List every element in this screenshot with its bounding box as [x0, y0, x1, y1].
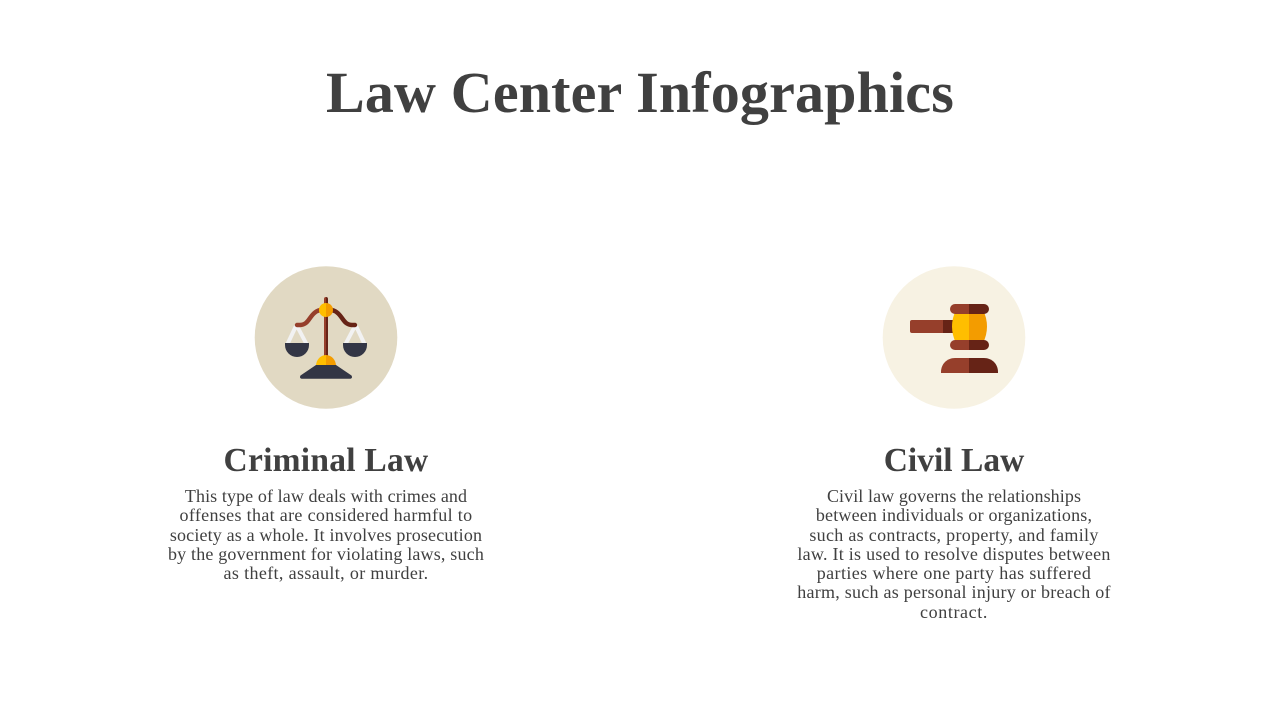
text: civil law description: harm, such as personal injury or breach of [797, 582, 1111, 602]
text: civil law description [797, 486, 1111, 622]
scales pans [285, 343, 367, 357]
heading: civil law: Civil Law [884, 442, 1024, 479]
text: criminal law description: as theft, assault, or murder. [224, 563, 428, 583]
gavel top cap [950, 304, 989, 314]
gavel background circle [883, 266, 1025, 409]
scales post [324, 297, 328, 356]
heading: criminal law: Criminal Law [224, 442, 428, 479]
text: civil law description: between individuals or organizations, [816, 505, 1092, 525]
title: Law Center Infographics [326, 60, 954, 125]
text: criminal law description: offenses that are considered harmful to [180, 505, 472, 525]
text: civil law description: contract. [920, 602, 988, 622]
scales beam [297, 310, 355, 325]
text: criminal law description [168, 486, 484, 583]
text: civil law description: parties where one party has suffered [817, 563, 1091, 583]
gavel block [941, 358, 998, 373]
scales strings [287, 326, 365, 345]
icon: gavel [882, 266, 1026, 409]
icon: scales of justice [254, 266, 398, 409]
text: criminal law description: by the government for violating laws, such [168, 544, 484, 564]
gavel bottom cap [950, 340, 989, 350]
gavel head [952, 310, 987, 343]
scales hub [319, 303, 333, 317]
text: civil law description: law. It is used to resolve disputes between [797, 544, 1111, 564]
gavel handle [910, 320, 953, 333]
scales background circle [255, 266, 397, 409]
text: civil law description: Civil law governs the relationships [827, 486, 1081, 506]
scales base dome [316, 355, 336, 366]
text: criminal law description: society as a whole. It involves prosecution [170, 525, 482, 545]
text: civil law description: such as contracts, property, and family [809, 525, 1099, 545]
scales base [300, 365, 352, 379]
text: criminal law description: This type of law deals with crimes and [185, 486, 467, 506]
